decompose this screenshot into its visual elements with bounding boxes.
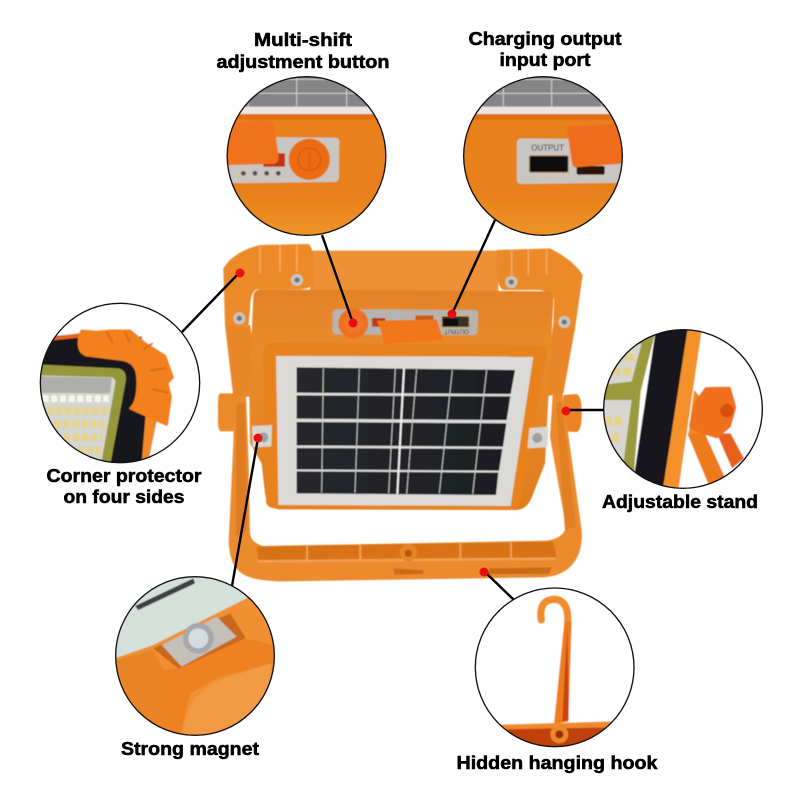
callout circle: corner protector [40,302,200,464]
label: corner protector on four sides: on four sides [64,487,184,507]
callout circle: adjustment button [226,76,386,236]
label: strong magnet: Strong magnet [121,739,259,759]
callout circle: hanging hook [474,587,635,748]
magnet clips [252,425,549,448]
left stand knob [218,393,236,431]
label: charging output input port: input port [500,50,590,70]
mirrored output label: OUTPUT [444,327,469,333]
label: charging output input port: Charging output [468,29,622,49]
label: charging output input port [468,29,622,70]
callout circle: adjustable stand [603,329,763,489]
label: hidden hanging hook: Hidden hanging hook [456,753,659,773]
leader lines and callout dots [182,220,606,600]
label: adjustable stand: Adjustable stand [602,492,758,512]
control plate with button and ports [333,308,478,344]
output label in callout: OUTPUT [531,144,564,153]
label: corner protector on four sides [46,466,202,507]
solar panel [276,356,533,506]
label: multi-shift adjustment button [216,30,390,72]
label: corner protector on four sides: Corner protector [46,466,202,486]
label: multi-shift adjustment button: adjustment button [216,52,390,72]
rear frame and corner protectors [223,244,583,397]
label: multi-shift adjustment button: Multi-shift [254,30,352,50]
folding stand [229,390,582,581]
light housing [249,289,553,510]
right stand knob [563,394,582,432]
callout circle: charging ports [463,76,623,236]
callout circle: strong magnet [115,576,275,736]
central product: solar work light [218,244,583,581]
